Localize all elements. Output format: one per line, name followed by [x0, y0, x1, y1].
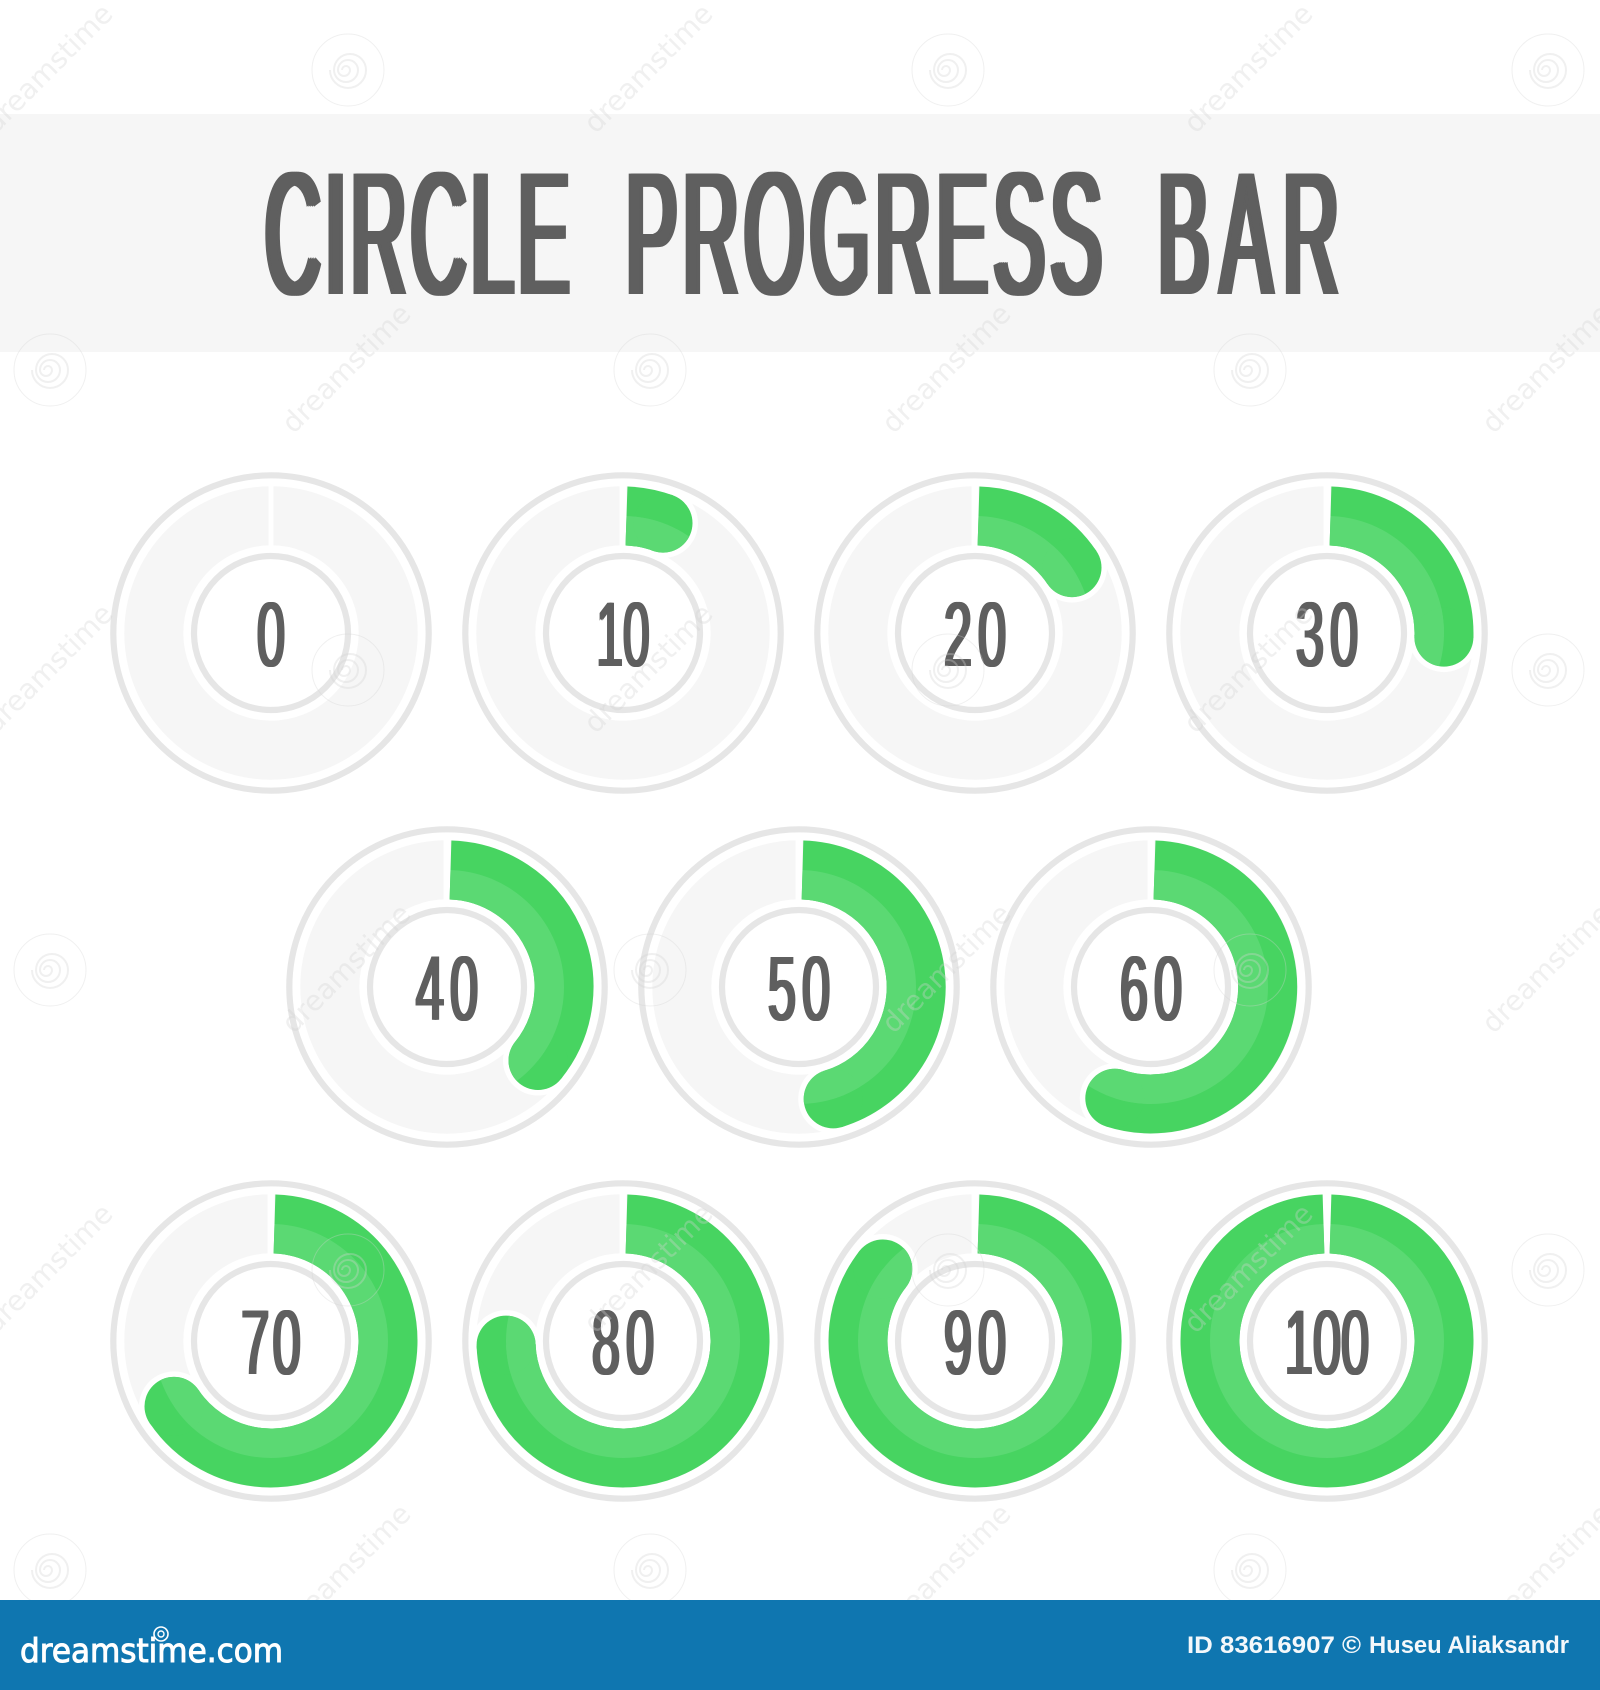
stock watermarks: dreamstime — [275, 297, 417, 439]
gauge: 100 percent: 100 — [1285, 1292, 1369, 1394]
footer logo: dreamstime.com — [20, 1631, 283, 1670]
gauge: 20 percent — [814, 472, 1136, 794]
gauge: 20 percent: 20 — [944, 584, 1012, 686]
stock watermarks: dreamstime — [577, 0, 719, 139]
gauge: 80 percent: 80 — [592, 1292, 660, 1394]
gauge: 30 percent: 30 — [1296, 584, 1364, 686]
title — [265, 137, 1350, 332]
stock watermarks: dreamstime — [1177, 1197, 1319, 1339]
stock watermarks: dreamstime — [577, 1197, 719, 1339]
gauge: 30 percent — [1166, 472, 1488, 794]
gauge: 100 percent — [1166, 1180, 1488, 1502]
gauge: 50 percent: 50 — [768, 938, 836, 1040]
gauge: 90 percent — [814, 1180, 1136, 1502]
gauge: 70 percent — [110, 1180, 432, 1502]
stock watermarks: dreamstime — [875, 1497, 1017, 1639]
gauge: 50 percent — [638, 826, 960, 1148]
footer credit — [1187, 1632, 1569, 1659]
gauge: 10 percent: 10 — [596, 584, 650, 686]
gauge: 0 percent: 0 — [257, 584, 291, 686]
gauge: 40 percent: 40 — [415, 938, 484, 1040]
gauge: 90 percent: 90 — [944, 1292, 1012, 1394]
title: BAR — [1158, 137, 1350, 332]
gauge: 70 percent: 70 — [241, 1292, 304, 1394]
gauge: 40 percent — [286, 826, 608, 1148]
gauge: 10 percent — [462, 472, 784, 794]
stock watermarks: dreamstime — [875, 297, 1017, 439]
title: PROGRESS — [626, 137, 1107, 332]
stock watermarks: dreamstime — [275, 897, 417, 1039]
stock watermarks: dreamstime — [1177, 0, 1319, 139]
stock watermarks: dreamstime — [1177, 597, 1319, 739]
gauge: 80 percent — [462, 1180, 784, 1502]
footer credit: ID 83616907 © — [1187, 1632, 1361, 1659]
gauge: 60 percent — [990, 826, 1312, 1148]
gauge: 60 percent: 60 — [1120, 938, 1188, 1040]
title: CIRCLE — [265, 137, 574, 332]
stock watermarks: dreamstime — [275, 1497, 417, 1639]
footer credit: Huseu Aliaksandr — [1369, 1632, 1569, 1659]
stock watermarks: dreamstime — [875, 897, 1017, 1039]
gauge: 0 percent — [110, 472, 432, 794]
title band — [0, 114, 1600, 352]
footer bar — [0, 1600, 1600, 1690]
stock watermarks: dreamstime — [577, 597, 719, 739]
